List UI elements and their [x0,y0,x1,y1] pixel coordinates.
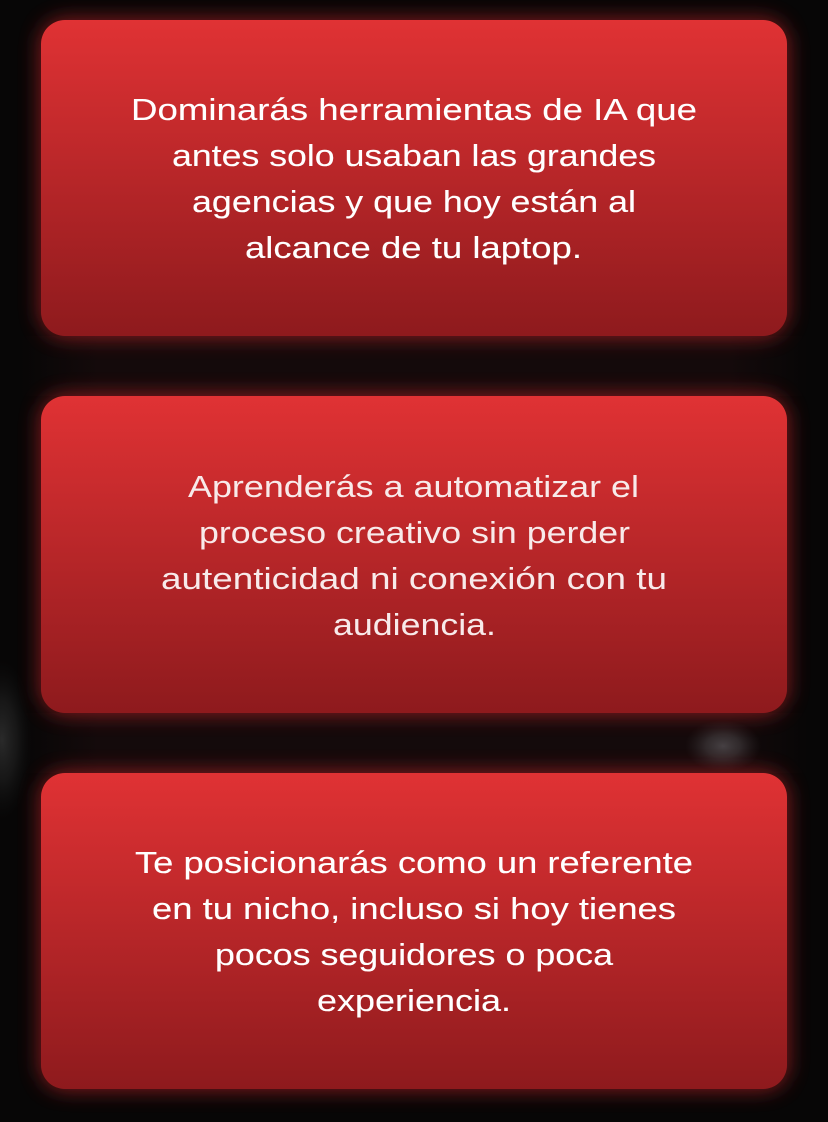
text block: card 1 [131,92,697,265]
text block: card 2: autenticidad ni conexión con tu [161,561,667,596]
text block: card 3: en tu nicho, incluso si hoy tienes [152,891,676,926]
text block: card 2: audiencia. [333,607,496,642]
text block: card 2 [161,469,667,642]
text block: card 2: Aprenderás a automatizar el [188,469,639,504]
panel: card 3 [41,773,787,1089]
text block: card 1: Dominarás herramientas de IA que [131,92,697,127]
text block: card 1: agencias y que hoy están al [192,184,636,219]
text block: card 3: experiencia. [317,983,511,1018]
text block: card 1: alcance de tu laptop. [245,230,582,265]
text block: card 2: proceso creativo sin perder [199,515,630,550]
panel: card 2 [41,396,787,713]
panel: card 1 [41,20,787,336]
text block: card 3 [135,845,693,1018]
text block: card 1: antes solo usaban las grandes [172,138,656,173]
text block: card 3: pocos seguidores o poca [215,937,614,972]
text block: card 3: Te posicionarás como un referente [135,845,693,880]
